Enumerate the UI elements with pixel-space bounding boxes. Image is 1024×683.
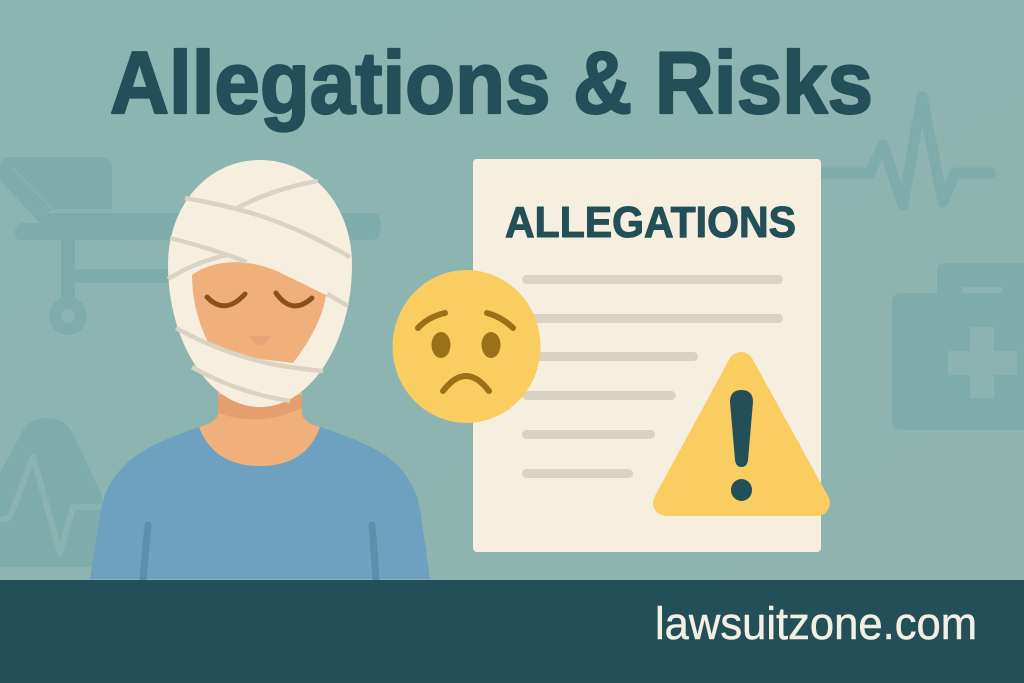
closed eyes [207,293,312,306]
neck shadow [218,395,302,419]
bandaged head [168,160,352,407]
title: Allegations & Risks [110,33,873,132]
background icon: hospital stretcher [0,157,381,329]
shirt [90,427,430,579]
eyebrows [418,313,513,328]
paper [473,159,821,552]
bandage wrap lines [168,181,350,401]
frown [443,376,489,391]
exclamation mark [730,390,753,467]
allegations document [473,159,821,552]
patient figure [90,160,430,579]
footer band [0,580,1024,683]
nose [249,336,272,345]
sleeve creases [143,525,376,579]
warning triangle [666,365,817,503]
eyes [432,332,450,358]
background icon: heart monitor left [0,418,102,567]
neck [199,390,320,466]
sad emoji [392,270,540,423]
background icon: pulse line right [820,97,990,205]
text placeholder lines [522,275,783,478]
document heading: ALLEGATIONS [505,198,796,247]
face [192,262,326,363]
footer website text: lawsuitzone.com [655,598,977,649]
background icon: medical kit [892,263,1024,430]
